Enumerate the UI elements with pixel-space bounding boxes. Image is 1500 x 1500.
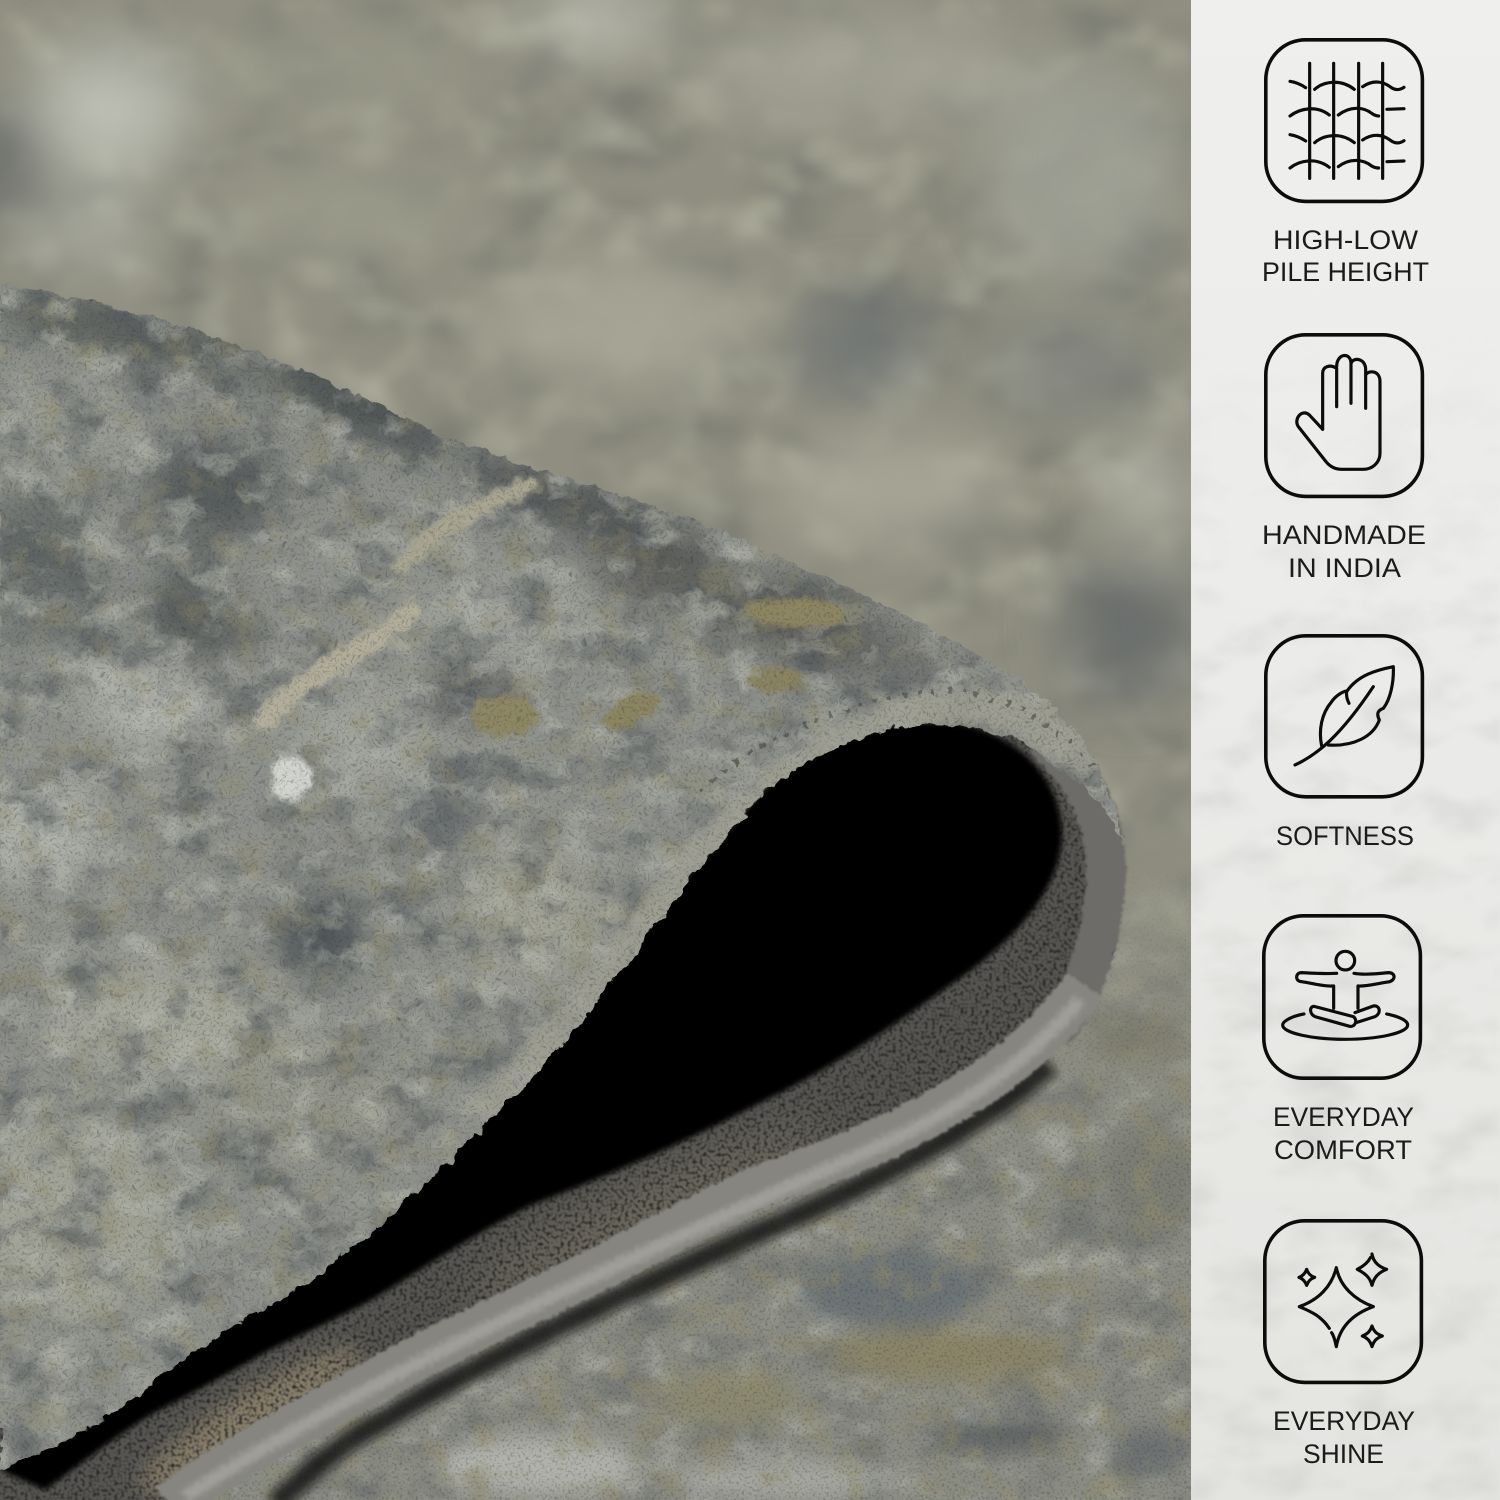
label: EVERYDAY	[1273, 1102, 1414, 1132]
foreground floor at lower right	[0, 898, 1191, 1500]
feature: everyday comfort	[1264, 916, 1420, 1165]
feature: handmade in India	[1262, 335, 1426, 583]
label: SHINE	[1303, 1439, 1384, 1469]
label	[1273, 1406, 1415, 1469]
icon: hand	[1297, 355, 1380, 469]
label: HANDMADE	[1262, 520, 1426, 550]
label	[1273, 1102, 1414, 1165]
icon: feather	[1295, 667, 1393, 765]
label	[1262, 225, 1429, 287]
feature: softness	[1266, 636, 1422, 851]
woven backing	[0, 725, 1116, 1500]
rolled rug top surface	[0, 283, 1125, 1470]
tan pile streaks	[265, 485, 847, 800]
background rug, out of focus	[0, 0, 1200, 1500]
feature: high-low pile height	[1262, 40, 1429, 287]
label: SOFTNESS	[1276, 821, 1414, 851]
label: COMFORT	[1274, 1135, 1412, 1165]
label: HIGH-LOW	[1273, 225, 1419, 255]
label: EVERYDAY	[1273, 1406, 1415, 1436]
label: PILE HEIGHT	[1262, 257, 1429, 287]
photo: rolled rug on floor	[0, 0, 1200, 1500]
label	[1262, 520, 1426, 583]
label: IN INDIA	[1288, 553, 1401, 583]
side panel	[1191, 0, 1500, 1500]
icon: woven pile	[1290, 63, 1404, 178]
feature: everyday shine	[1265, 1221, 1421, 1469]
fluffy rim wall and binding edge	[170, 745, 1106, 1500]
shadow beneath binding	[275, 1065, 1050, 1500]
knotted rim of the fold	[480, 705, 1095, 1120]
icon: seated figure	[1283, 951, 1408, 1039]
icon: sparkles	[1299, 1254, 1387, 1347]
black pocket inside the fold	[0, 721, 1062, 1490]
underside of rug with binding edge	[0, 723, 1128, 1500]
